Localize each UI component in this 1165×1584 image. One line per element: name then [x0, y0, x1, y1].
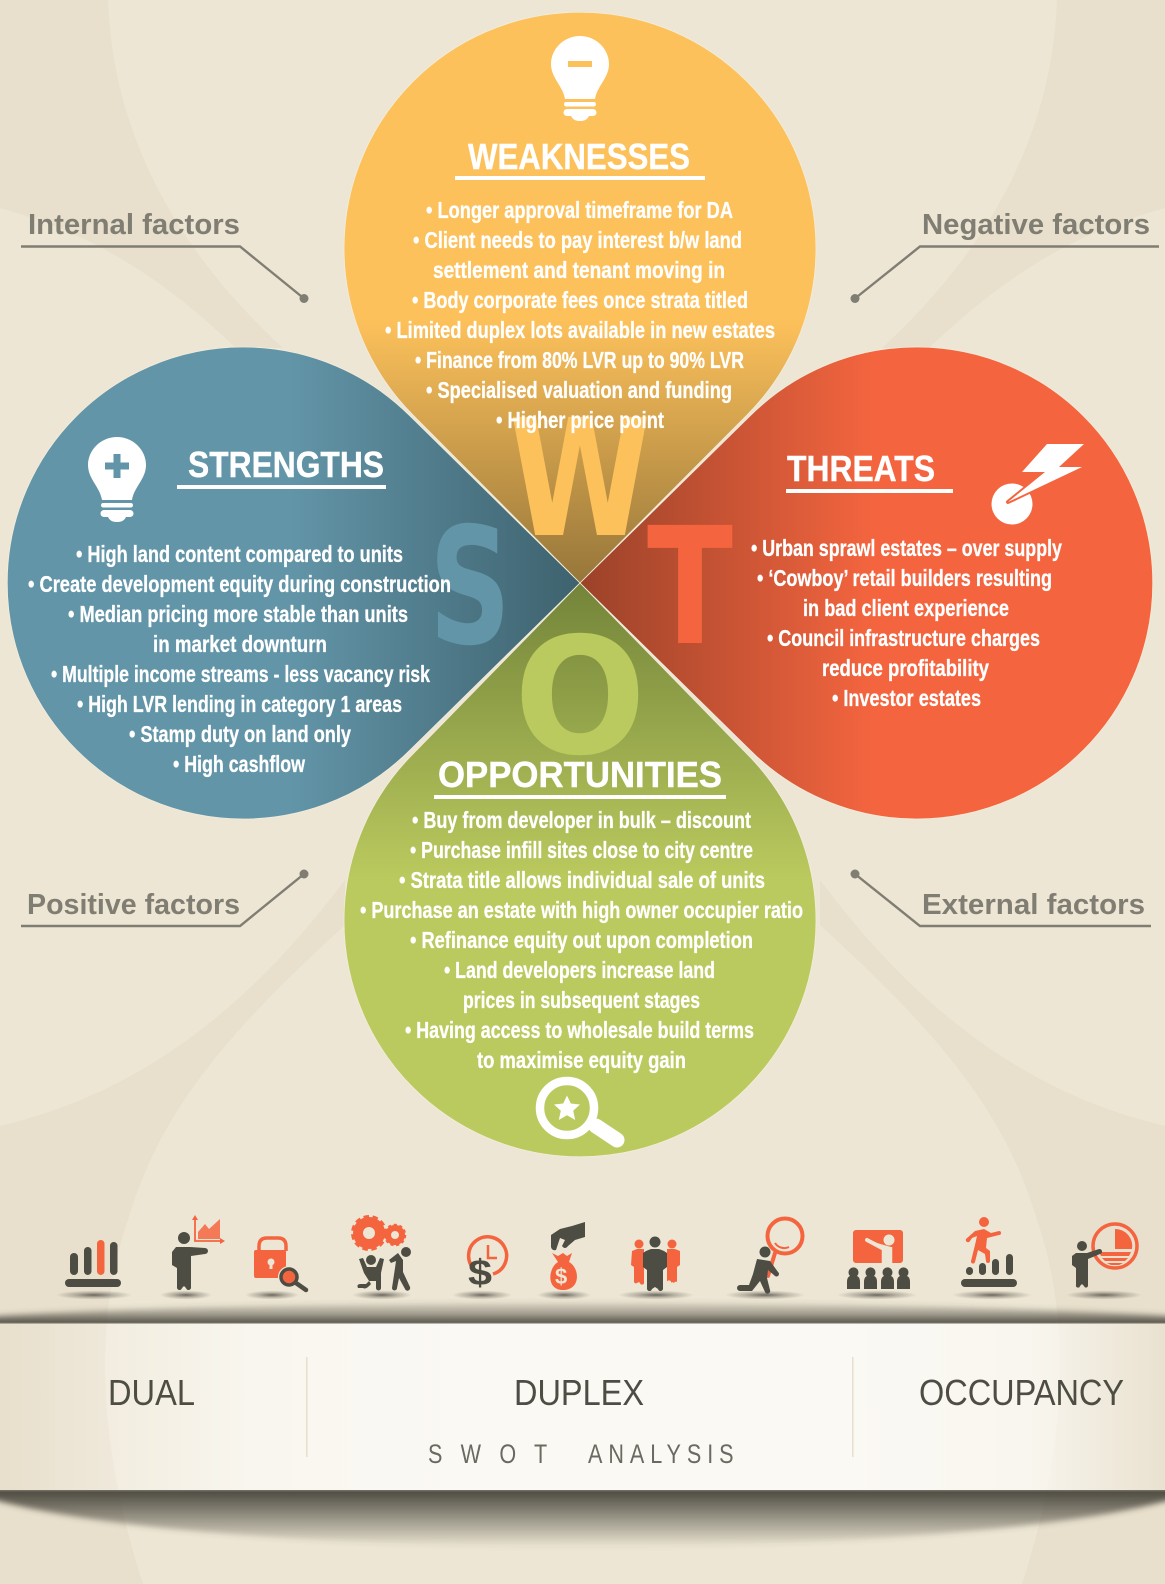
strengths list: • High LVR lending in category 1 areas: [77, 691, 402, 717]
callout: negative factors: Negative factors: [922, 209, 1150, 241]
icon: figure climbing bars: [961, 1217, 1017, 1287]
opportunities list: [360, 807, 803, 1073]
strengths list: • Multiple income streams - less vacancy risk: [51, 661, 430, 687]
weaknesses list: • Body corporate fees once strata titled: [412, 287, 748, 313]
threats list: • ‘Cowboy’ retail builders resulting: [757, 565, 1052, 591]
panel: opportunities: [344, 583, 816, 1157]
icon: runner with magnifying glass: [737, 1218, 802, 1294]
opportunities list: • Buy from developer in bulk – discount: [412, 807, 751, 833]
icon: team lifting gears: [354, 1218, 411, 1291]
weaknesses list: • Limited duplex lots available in new estates: [385, 317, 775, 343]
letter O: O: [514, 604, 646, 792]
panel: strengths: [7, 347, 580, 819]
threats list: reduce profitability: [822, 655, 989, 681]
strengths list: • Create development equity during construction: [28, 571, 451, 597]
SWOT analysis subtitle: ANALYSIS: [588, 1440, 734, 1470]
callout: internal factors: [21, 209, 308, 303]
weaknesses list: • Specialised valuation and funding: [426, 377, 732, 403]
opportunities list: • Strata title allows individual sale of units: [399, 867, 765, 893]
callout: external factors: External factors: [922, 889, 1145, 921]
icon: lightning bolt striking circle: [992, 444, 1084, 524]
opportunities list: prices in subsequent stages: [463, 987, 700, 1013]
opportunities list: • Purchase an estate with high owner occupier ratio: [360, 897, 803, 923]
threats list: in bad client experience: [803, 595, 1009, 621]
panel: threats: [580, 347, 1153, 819]
heading: THREATS: [787, 448, 935, 489]
SWOT analysis subtitle: [428, 1440, 734, 1470]
heading: WEAKNESSES: [468, 136, 690, 177]
icon: hand dropping money bag: [550, 1222, 585, 1290]
callout: negative factors: [850, 209, 1159, 303]
OCCUPANCY: OCCUPANCY: [919, 1372, 1124, 1413]
heading: STRENGTHS: [188, 444, 384, 485]
opportunities list: • Having access to wholesale build terms: [405, 1017, 754, 1043]
title banner: [0, 1322, 1165, 1492]
opportunities list: to maximise equity gain: [477, 1047, 686, 1073]
icon: light bulb plus: [88, 437, 146, 522]
heading: OPPORTUNITIES: [438, 754, 722, 795]
weaknesses list: • Higher price point: [496, 407, 664, 433]
threats list: • Council infrastructure charges: [767, 625, 1040, 651]
icon shadows: [56, 1290, 1142, 1300]
opportunities list: • Purchase infill sites close to city centre: [410, 837, 753, 863]
icon: clock and dollar: $: [468, 1252, 492, 1293]
strengths list: • High land content compared to units: [76, 541, 403, 567]
icon: light bulb minus: [551, 36, 609, 121]
strengths list: • Stamp duty on land only: [129, 721, 351, 747]
DUAL: DUAL: [108, 1372, 195, 1413]
letter T: T: [647, 494, 733, 682]
SWOT analysis subtitle: S W O T: [428, 1440, 547, 1470]
strengths list: in market downturn: [153, 631, 327, 657]
threats list: [751, 535, 1062, 711]
icon: magnifier with star: [540, 1081, 617, 1140]
weaknesses list: [385, 197, 775, 433]
strengths list: • Median pricing more stable than units: [68, 601, 408, 627]
threats list: • Investor estates: [832, 685, 981, 711]
weaknesses list: • Longer approval timeframe for DA: [426, 197, 733, 223]
callout: positive factors: Positive factors: [27, 889, 240, 921]
icon: padlock with magnifier: [254, 1238, 306, 1290]
icon: bar chart: [65, 1240, 121, 1287]
icon: hand dropping money bag: $: [555, 1264, 567, 1289]
weaknesses list: settlement and tenant moving in: [433, 257, 725, 283]
letter S: S: [429, 494, 511, 682]
callout: external factors: [850, 870, 1151, 926]
callout: positive factors: [21, 870, 308, 926]
threats list: • Urban sprawl estates – over supply: [751, 535, 1062, 561]
opportunities list: • Land developers increase land: [444, 957, 715, 983]
callout: internal factors: Internal factors: [28, 209, 240, 241]
DUPLEX: DUPLEX: [514, 1372, 644, 1413]
icon: presenter with pie chart: [1072, 1224, 1137, 1288]
letter W: W: [509, 386, 651, 574]
icon: clock and dollar: [468, 1237, 507, 1293]
icon: presentation audience: [847, 1230, 910, 1289]
strengths list: [28, 541, 451, 777]
weaknesses list: • Client needs to pay interest b/w land: [413, 227, 742, 253]
weaknesses list: • Finance from 80% LVR up to 90% LVR: [415, 347, 744, 373]
opportunities list: • Refinance equity out upon completion: [410, 927, 753, 953]
icon: business team: [631, 1236, 680, 1291]
strengths list: • High cashflow: [173, 751, 305, 777]
banner shadows: [0, 1303, 1165, 1547]
icon: presenter with line chart: [172, 1215, 225, 1290]
panel: weaknesses: [344, 12, 816, 583]
